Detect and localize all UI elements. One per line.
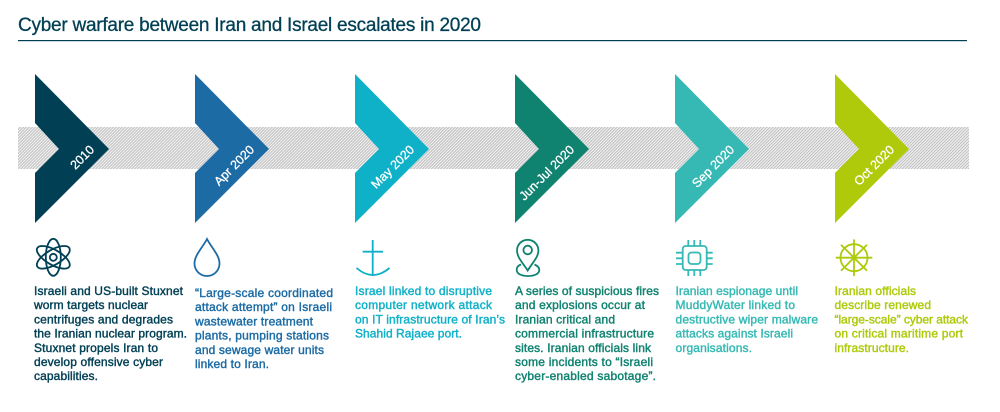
text: 2010 description: develop offensive cyber bbox=[34, 355, 163, 369]
text: Sep 2020 description: organisations. bbox=[676, 341, 752, 355]
chevron: Oct 2020 bbox=[835, 74, 909, 223]
text: Apr 2020 description: attack attempt” on Israeli bbox=[195, 300, 332, 314]
icon: ship wheel bbox=[836, 239, 872, 276]
text: Jun-Jul 2020 description: cyber-enabled sabotage”. bbox=[515, 369, 656, 383]
text: Jun-Jul 2020 description: A series of suspicious fires bbox=[515, 284, 659, 298]
text: Jun-Jul 2020 description: some incidents to “Israeli bbox=[515, 355, 653, 369]
text: Apr 2020 description: and sewage water units bbox=[195, 343, 324, 357]
text: Apr 2020 description: “Large-scale coordinated bbox=[195, 286, 333, 300]
text: May 2020 description: Israel linked to disruptive bbox=[355, 284, 492, 298]
text: Jun-Jul 2020 description: commercial infrastructure bbox=[515, 327, 654, 341]
text: 2010 description bbox=[33, 284, 187, 383]
chevron: Sep 2020: Sep 2020 bbox=[689, 143, 737, 190]
chevron: 2010 bbox=[35, 74, 109, 223]
chevron: Apr 2020 bbox=[195, 74, 269, 223]
text: Sep 2020 description: attacks against Israeli bbox=[676, 327, 793, 341]
chevron: Apr 2020: Apr 2020 bbox=[211, 143, 257, 188]
text: Jun-Jul 2020 description: sites. Iranian officials link bbox=[515, 341, 652, 355]
text: 2010 description: the Iranian nuclear program. bbox=[34, 327, 187, 341]
text: 2010 description: centrifuges and degrades bbox=[34, 312, 173, 326]
text: Oct 2020 description: describe renewed bbox=[834, 298, 931, 312]
chevron: Jun-Jul 2020: Jun-Jul 2020 bbox=[517, 143, 577, 203]
text: Sep 2020 description: Iranian espionage until bbox=[676, 284, 798, 298]
chevron: Sep 2020 bbox=[675, 74, 749, 223]
text: Sep 2020 description: destructive wiper malware bbox=[676, 312, 818, 326]
text: May 2020 description: on IT infrastructure of Iran’s bbox=[355, 312, 505, 326]
chevron: Jun-Jul 2020 bbox=[515, 74, 589, 223]
timeline band bbox=[18, 127, 969, 169]
text: Sep 2020 description bbox=[676, 284, 818, 355]
chevron: May 2020: May 2020 bbox=[368, 143, 417, 191]
text: Oct 2020 description: infrastructure. bbox=[834, 341, 909, 355]
icon: location pin bbox=[517, 240, 539, 276]
icon: water drop bbox=[194, 239, 220, 276]
icon: microchip bbox=[676, 240, 713, 276]
text: Oct 2020 description bbox=[834, 284, 969, 355]
text: May 2020 description bbox=[355, 284, 505, 341]
icon: anchor bbox=[356, 240, 390, 276]
icon: atom bbox=[34, 239, 73, 276]
title: Cyber warfare between Iran and Israel escalates in 2020 bbox=[18, 15, 481, 36]
text: Oct 2020 description: on critical maritime port bbox=[834, 327, 964, 341]
text: May 2020 description: computer network attack bbox=[355, 298, 493, 312]
text: 2010 description: worm targets nuclear bbox=[33, 298, 148, 312]
text: 2010 description: capabilities. bbox=[34, 369, 98, 383]
text: Jun-Jul 2020 description bbox=[515, 284, 659, 383]
text: Apr 2020 description: linked to Iran. bbox=[195, 357, 269, 371]
text: 2010 description: Israeli and US-built Stuxnet bbox=[34, 284, 184, 298]
text: Sep 2020 description: MuddyWater linked to bbox=[676, 298, 795, 312]
text: Oct 2020 description: “large-scale” cyber attack bbox=[834, 312, 969, 326]
text: Apr 2020 description: plants, pumping stations bbox=[195, 329, 329, 343]
text: Jun-Jul 2020 description: Iranian critical and bbox=[515, 312, 615, 326]
chevron: May 2020 bbox=[355, 74, 429, 223]
chevron: Oct 2020: Oct 2020 bbox=[851, 143, 897, 188]
chevron: 2010: 2010 bbox=[68, 143, 97, 172]
text: May 2020 description: Shahid Rajaee port. bbox=[355, 327, 462, 341]
text: Jun-Jul 2020 description: and explosions occur at bbox=[515, 298, 646, 312]
text: Oct 2020 description: Iranian officials bbox=[834, 284, 916, 298]
text: Apr 2020 description: wastewater treatment bbox=[194, 314, 314, 328]
text: Apr 2020 description bbox=[194, 286, 333, 371]
text: 2010 description: Stuxnet propels Iran to bbox=[34, 341, 158, 355]
